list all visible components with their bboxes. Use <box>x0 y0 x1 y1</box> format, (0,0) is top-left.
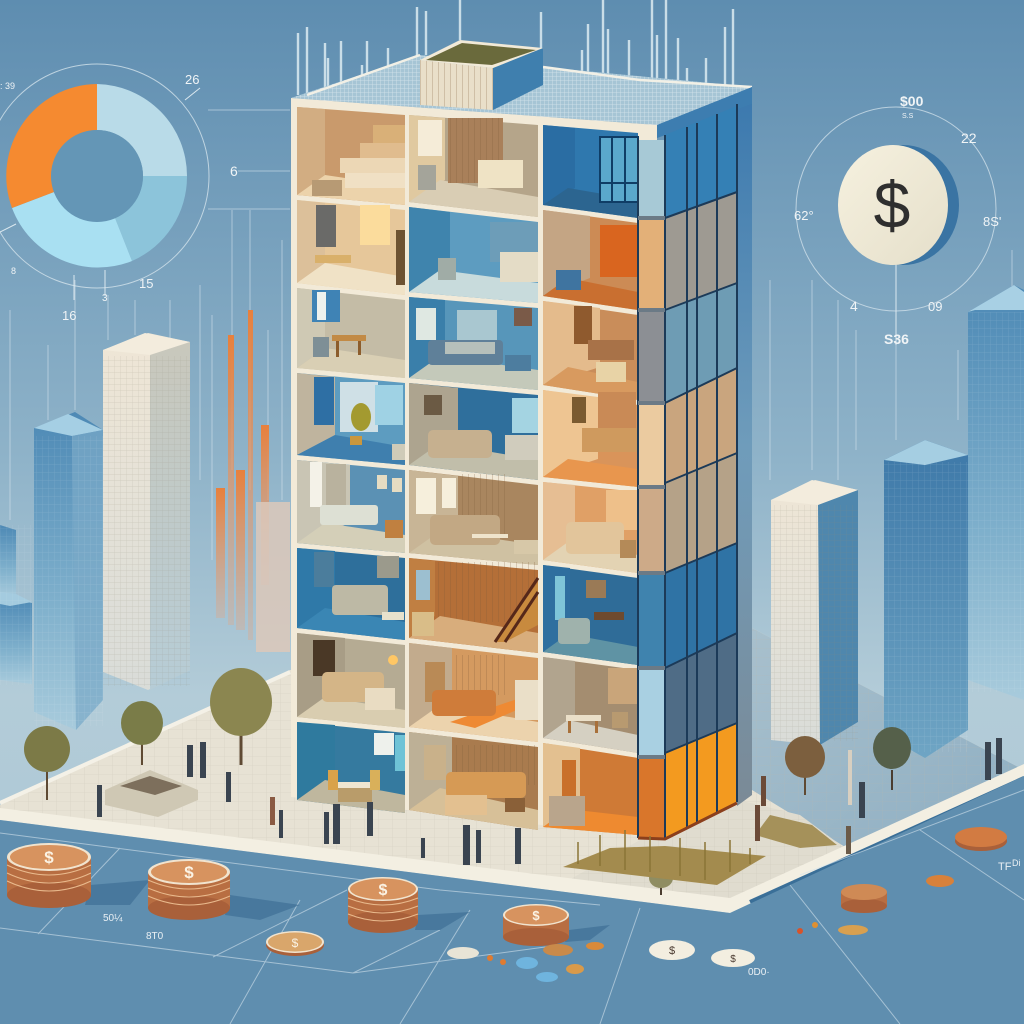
tree 2 <box>121 701 163 765</box>
donut labels: : 39 <box>0 81 15 91</box>
floor labels: 0D0· <box>748 967 770 978</box>
trees <box>24 668 911 800</box>
facade base <box>291 98 657 838</box>
room L2 <box>297 200 405 295</box>
reeds <box>563 830 766 885</box>
badge labels: 4 <box>850 298 858 314</box>
white coins <box>649 940 695 960</box>
ground tree <box>649 868 673 895</box>
room L3 <box>297 288 405 378</box>
roof <box>291 0 752 125</box>
staircase <box>495 582 538 642</box>
corner wall strip <box>737 87 752 806</box>
orange bars <box>216 310 269 640</box>
donut labels: 8 <box>11 266 16 276</box>
building <box>291 0 752 839</box>
room M7 <box>409 643 538 742</box>
small tokens <box>447 875 954 982</box>
room R7 <box>543 657 638 753</box>
donut labels: 16 <box>62 308 76 323</box>
coin single <box>266 931 324 956</box>
room R3 <box>543 301 638 400</box>
left glass panes <box>638 140 665 838</box>
donut labels: 6 <box>230 163 238 179</box>
room R2 <box>543 210 638 310</box>
donut labels: 15 <box>139 276 153 291</box>
roof planter <box>420 40 543 110</box>
right glass panes <box>665 106 737 838</box>
glass mullions <box>638 104 737 838</box>
room L5 <box>297 460 405 553</box>
coin stack right <box>841 884 887 913</box>
reeds back <box>755 815 837 848</box>
coin stack 2: $ <box>184 863 194 882</box>
floor labels: 50¼ <box>103 912 123 924</box>
tower cream right <box>771 480 858 745</box>
bottom blue floor <box>0 776 1024 1024</box>
room L6 <box>297 548 405 640</box>
tower blue right <box>884 440 968 758</box>
column 3 rooms <box>543 125 638 835</box>
white coins: $ <box>669 945 675 957</box>
tree 3 <box>210 668 272 765</box>
tower cream left <box>103 333 190 690</box>
tree 5 <box>873 727 911 790</box>
tower blue left <box>34 412 103 730</box>
dollar badge <box>796 107 996 345</box>
tower beige <box>256 502 290 652</box>
donut labels <box>0 72 238 323</box>
room R6 <box>543 565 638 665</box>
ground plaza <box>0 628 1024 913</box>
coin stack 2 <box>148 859 230 920</box>
badge labels: 62° <box>794 208 814 223</box>
coin stacks <box>7 827 1007 982</box>
tower far right <box>968 285 1024 700</box>
badge labels: 22 <box>961 130 977 146</box>
room M6 <box>409 558 538 653</box>
room R4 <box>543 390 638 487</box>
room R8 <box>543 743 638 835</box>
floor labels: TF <box>998 861 1012 873</box>
room M3 <box>409 297 538 390</box>
room R5 <box>543 482 638 573</box>
coin stack 4 <box>503 904 569 946</box>
white coin 2: $ <box>730 954 736 965</box>
room L1 <box>297 107 405 205</box>
column 1 rooms <box>297 107 405 813</box>
badge labels: S36 <box>884 331 909 347</box>
roof posts <box>298 0 733 120</box>
floor labels: 8T0 <box>146 931 164 942</box>
glass corner <box>638 87 752 839</box>
room M2 <box>409 207 538 303</box>
room M4 <box>409 383 538 480</box>
people <box>97 738 1002 865</box>
tree 4 <box>785 736 825 795</box>
white coin 2 <box>711 949 755 967</box>
badge labels: $00 <box>900 93 924 109</box>
coin single: $ <box>292 936 299 950</box>
coin stack 4: $ <box>532 908 540 923</box>
right towers <box>771 285 1024 758</box>
room R1 <box>543 125 638 218</box>
column 2 rooms <box>409 115 538 830</box>
donut labels: 26 <box>185 72 199 87</box>
badge labels <box>794 93 1001 347</box>
room L7 <box>297 633 405 728</box>
tree 1 <box>24 726 70 800</box>
floor labels <box>103 858 1020 978</box>
background gridlines <box>10 110 1012 560</box>
badge labels: S.S <box>902 113 914 120</box>
coin stack 3: $ <box>379 882 388 899</box>
room M5 <box>409 470 538 565</box>
left towers <box>0 310 290 730</box>
coin stack 1: $ <box>44 848 54 867</box>
lobby furniture <box>105 770 198 817</box>
badge labels: 09 <box>928 299 942 314</box>
floor labels: Di <box>1012 858 1020 868</box>
tower far left small <box>0 525 32 685</box>
badge labels: 8S' <box>983 214 1001 229</box>
room M1 <box>409 115 538 217</box>
room M8 <box>409 732 538 830</box>
room L8 <box>297 722 405 813</box>
coin stack 3 <box>348 877 418 933</box>
room L4 <box>297 373 405 465</box>
coin stack 1 <box>7 843 91 908</box>
donut chart <box>0 64 238 323</box>
coin shadows <box>85 880 610 942</box>
coin far right <box>955 827 1007 851</box>
dollar sign: $ <box>874 168 910 242</box>
donut labels: 3 <box>102 293 108 304</box>
